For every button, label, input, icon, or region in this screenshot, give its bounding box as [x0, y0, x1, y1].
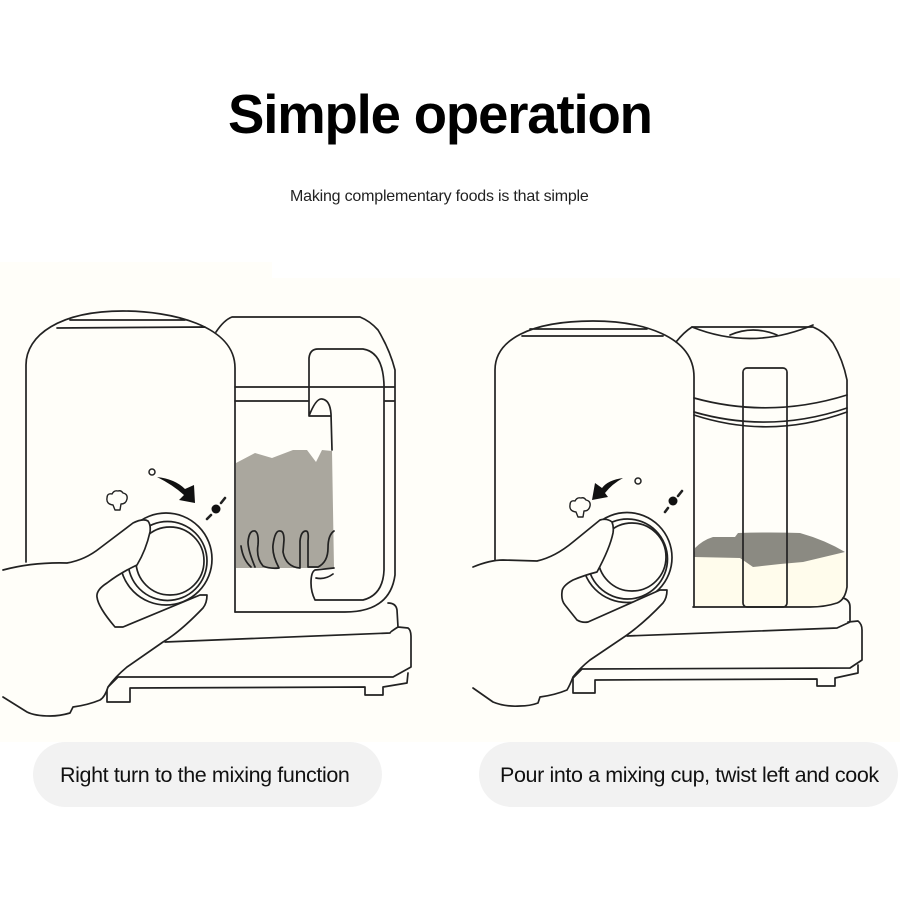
- caption text right: Pour into a mixing cup, twist left and cook: [500, 763, 879, 787]
- jar handle, left: [309, 349, 384, 600]
- hand, left: [3, 520, 207, 716]
- title: Simple operation: [228, 84, 652, 145]
- blade, left jar: [241, 531, 334, 568]
- base, right: [573, 598, 862, 693]
- jar handle, right: [743, 368, 787, 607]
- jar, left: [216, 317, 395, 612]
- mode dot, right: [635, 478, 641, 484]
- arrow, right: [592, 478, 623, 500]
- arrow, left: [157, 477, 195, 503]
- caption pill right: [479, 742, 898, 807]
- subtitle: Making complementary foods is that simple: [290, 188, 589, 205]
- background panel: [0, 262, 900, 742]
- puree, right jar: [694, 532, 845, 567]
- candy icon, left: [207, 498, 225, 519]
- knob, right: [582, 512, 672, 602]
- broccoli icon, left: [107, 491, 127, 510]
- candy icon, right: [665, 491, 682, 512]
- jar, right: [676, 327, 847, 607]
- hand, right: [473, 519, 667, 706]
- right machine: [473, 321, 862, 706]
- liquid, right jar: [693, 553, 847, 607]
- caption text left: Right turn to the mixing function: [60, 763, 349, 787]
- base, left: [107, 603, 411, 702]
- mode dot, left: [149, 469, 155, 475]
- body, right: [495, 321, 694, 607]
- knob, left: [120, 513, 212, 605]
- caption pill left: [33, 742, 382, 807]
- body, left: [26, 311, 235, 612]
- left machine: [3, 311, 411, 716]
- jar lid and bands, right: [692, 325, 847, 427]
- food in left jar: [236, 450, 334, 568]
- broccoli icon, right: [570, 498, 590, 517]
